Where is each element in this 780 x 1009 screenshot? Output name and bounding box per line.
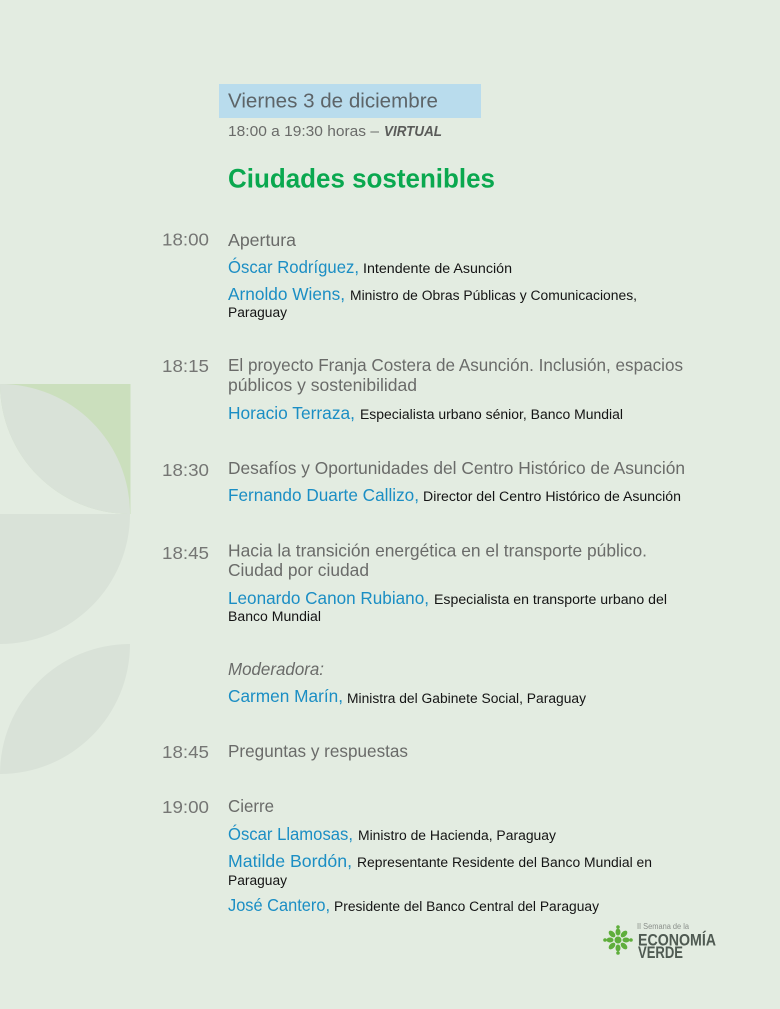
logo: Semana de la Economía Verde	[603, 922, 716, 962]
agenda item 18:45 transport: Leonardo Canon Rubiano,	[228, 588, 429, 608]
agenda item 18:00: Óscar Rodríguez,	[228, 256, 359, 277]
agenda item 18:30: Director del Centro Histórico de Asunción	[423, 489, 681, 504]
agenda item 18:30	[162, 458, 685, 505]
logo: Semana de la Economía Verde: ECONOMÍA	[638, 930, 716, 950]
icon: green flower	[603, 925, 633, 955]
agenda item 18:45 transport: 18:45	[162, 543, 209, 563]
agenda item 19:00: Cierre	[228, 796, 274, 816]
agenda item 19:00: Óscar Llamosas,	[228, 823, 353, 844]
agenda item 18:45 transport: Banco Mundial	[228, 609, 321, 624]
agenda item 18:45 transport: Hacia la transición energética en el transporte público.	[228, 540, 647, 560]
agenda item 19:00: José Cantero,	[228, 895, 330, 915]
agenda item 19:00: Ministro de Hacienda, Paraguay	[358, 828, 556, 843]
agenda item 18:15: Especialista urbano sénior, Banco Mundial	[360, 407, 623, 422]
agenda item 19:00: 19:00	[162, 797, 209, 817]
title: Ciudades sostenibles	[228, 164, 495, 194]
moderator: Ministra del Gabinete Social, Paraguay	[347, 691, 586, 706]
agenda item 19:00: Representante Residente del Banco Mundial en	[357, 855, 652, 870]
agenda item 18:45 transport: Especialista en transporte urbano del	[434, 592, 667, 607]
agenda item 19:00: Paraguay	[228, 873, 287, 888]
agenda item 18:00: Intendente de Asunción	[363, 261, 512, 276]
agenda item 18:00: 18:00	[162, 230, 209, 250]
agenda item 18:45 transport	[162, 540, 667, 624]
logo: Semana de la Economía Verde: II Semana de la	[637, 922, 690, 931]
moderator: Carmen Marín,	[228, 686, 343, 706]
agenda item 19:00	[162, 796, 652, 915]
agenda item 18:15: Horacio Terraza,	[228, 403, 355, 423]
agenda item 18:15: públicos y sostenibilidad	[228, 375, 417, 395]
schedule line: 18:00 a 19:30 horas –	[228, 123, 380, 140]
agenda item 19:00: Matilde Bordón,	[228, 851, 352, 871]
agenda item 18:00: Paraguay	[228, 305, 287, 320]
agenda item 18:30: 18:30	[162, 460, 209, 480]
agenda item 18:30: Fernando Duarte Callizo,	[228, 485, 419, 505]
agenda item 18:15: 18:15	[162, 356, 209, 376]
schedule line: VIRTUAL	[384, 123, 442, 140]
date banner	[219, 84, 481, 118]
agenda item 18:00: Arnoldo Wiens,	[228, 284, 345, 304]
agenda item 18:00	[162, 230, 637, 320]
agenda item 18:45 transport: Ciudad por ciudad	[228, 560, 369, 580]
date banner: Viernes 3 de diciembre	[228, 90, 438, 112]
agenda item 18:45 questions	[162, 741, 408, 762]
agenda item 18:45 questions: 18:45	[162, 742, 209, 762]
moderator	[228, 659, 586, 706]
agenda item 18:00: Apertura	[228, 230, 296, 250]
moderator: Moderadora:	[228, 659, 324, 679]
agenda item 18:45 questions: Preguntas y respuestas	[228, 741, 408, 761]
agenda item 18:15	[162, 355, 683, 423]
agenda item 18:30: Desafíos y Oportunidades del Centro Histórico de Asunción	[228, 458, 685, 478]
agenda item 19:00: Presidente del Banco Central del Paraguay	[334, 899, 599, 914]
decorative leaf shapes	[0, 384, 130, 774]
logo: Semana de la Economía Verde: VERDE	[638, 944, 683, 962]
agenda item 18:00: Ministro de Obras Públicas y Comunicaciones,	[350, 288, 637, 303]
schedule line	[228, 123, 442, 140]
agenda item 18:15: El proyecto Franja Costera de Asunción. Inclusión, espacios	[228, 355, 683, 375]
